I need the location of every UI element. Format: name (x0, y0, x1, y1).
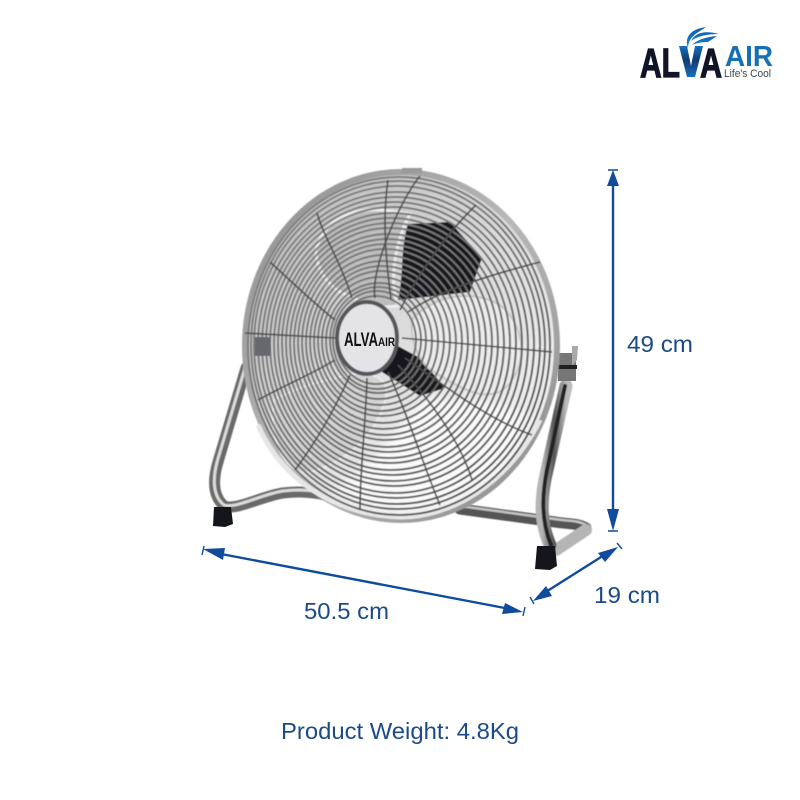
right stand tube (542, 386, 566, 545)
fan grille rings (248, 177, 550, 515)
fan outer rim (245, 172, 557, 520)
right end tube (556, 530, 586, 550)
hub logo text small: AIR (378, 335, 395, 349)
arrow: height (607, 170, 619, 531)
blade: right (412, 296, 521, 394)
left stand tube (215, 368, 335, 507)
label: height: 49 cm (627, 331, 693, 357)
product weight: Product Weight: 4.8Kg (281, 718, 519, 744)
logo wordmark AIR: AIR (725, 41, 773, 73)
fan motor (398, 222, 482, 300)
logo wordmark V (679, 46, 703, 77)
arrow: width (202, 546, 525, 616)
blade: top left (316, 210, 410, 308)
hub logo (344, 330, 395, 351)
logo wordmark A: A (700, 40, 722, 86)
left switch bracket (255, 337, 271, 356)
fan lower right bright area (330, 398, 530, 510)
left tube highlight (214, 368, 335, 506)
blade: bottom left (273, 374, 386, 473)
pivot knob (557, 346, 578, 381)
right foot (535, 546, 557, 570)
logo: Alva Air (640, 27, 773, 86)
fan head (245, 168, 557, 520)
hub logo text: ALVA (344, 330, 378, 351)
label: width: 50.5 cm (304, 598, 389, 624)
rear tube highlight (460, 506, 586, 525)
fan lower motor (382, 345, 445, 396)
arrow: depth (530, 543, 622, 604)
fan lower rim highlight (258, 420, 540, 517)
right tube shadow (543, 386, 565, 545)
logo swoosh (687, 27, 719, 48)
fan stand (214, 368, 586, 550)
fan grille spokes (245, 176, 552, 510)
label: depth: 19 cm (594, 582, 660, 608)
logo wordmark AL: AL (640, 40, 680, 86)
top clip (402, 168, 422, 173)
logo tagline: Life's Cool (724, 68, 771, 80)
fan hub (337, 302, 397, 374)
rear stand tube (460, 509, 586, 528)
left foot (213, 507, 233, 527)
